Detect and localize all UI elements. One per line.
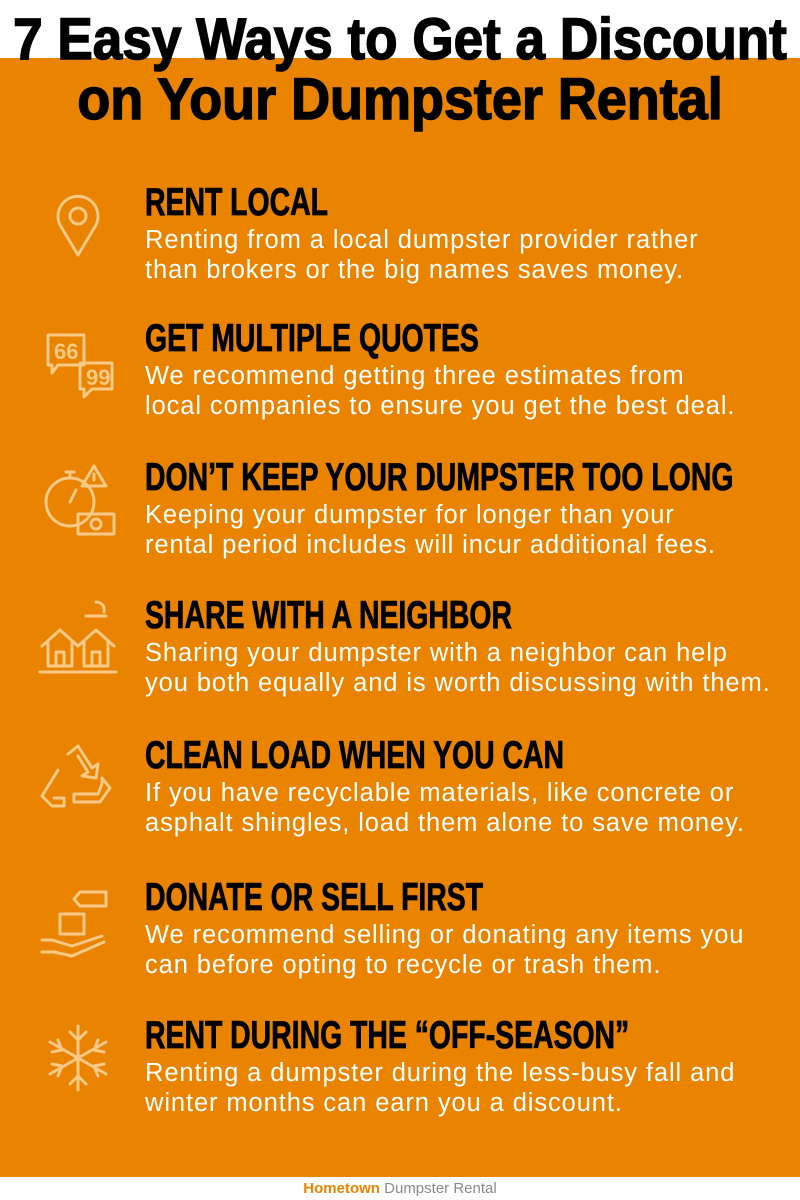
item: share with neighbor: Sharing your dumpster with a neighbor can help <box>145 639 728 667</box>
item: clean load: If you have recyclable materials, like concrete or <box>145 779 734 807</box>
footer logo: Hometown Dumpster Rental <box>303 1180 497 1197</box>
item: clean load: CLEAN LOAD WHEN YOU CAN <box>145 734 564 777</box>
item: don't keep too long: DON’T KEEP YOUR DUMPSTER TOO LONG <box>145 456 733 499</box>
item: donate or sell: can before opting to recycle or trash them. <box>145 951 661 979</box>
title <box>13 7 787 132</box>
item: off-season: winter months can earn you a discount. <box>145 1089 623 1117</box>
item: off-season: Renting a dumpster during the less-busy fall and <box>145 1059 735 1087</box>
title: on Your Dumpster Rental <box>77 67 723 132</box>
item: multiple quotes <box>46 317 735 420</box>
icon: quote bubbles: 99 <box>86 365 110 390</box>
item: clean load: asphalt shingles, load them alone to save money. <box>145 809 745 837</box>
item: share with neighbor <box>38 594 771 697</box>
item: multiple quotes: We recommend getting three estimates from <box>145 362 685 390</box>
icon: quote bubbles <box>46 334 114 399</box>
item: multiple quotes: local companies to ensure you get the best deal. <box>145 392 735 420</box>
item: share with neighbor: SHARE WITH A NEIGHBOR <box>145 594 512 637</box>
item: don't keep too long <box>44 456 733 559</box>
item: rent local: RENT LOCAL <box>145 181 328 224</box>
item: off-season: RENT DURING THE “OFF-SEASON” <box>145 1014 629 1057</box>
icon: houses <box>38 600 118 674</box>
title: 7 Easy Ways to Get a Discount <box>13 7 787 72</box>
item: don't keep too long: Keeping your dumpster for longer than your <box>145 501 675 529</box>
icon: stopwatch and money <box>44 464 116 536</box>
item: clean load <box>40 734 745 837</box>
item: rent local <box>56 181 699 284</box>
item: donate or sell: We recommend selling or donating any items you <box>145 921 744 949</box>
icon: recycle <box>40 744 112 808</box>
item: rent local: than brokers or the big names saves money. <box>145 256 684 284</box>
item: share with neighbor: you both equally and is worth discussing with them. <box>145 669 771 697</box>
item: donate or sell <box>40 876 744 979</box>
item: multiple quotes: GET MULTIPLE QUOTES <box>145 317 479 360</box>
icon: location pin <box>56 194 100 257</box>
item: don't keep too long: rental period includes will incur additional fees. <box>145 531 716 559</box>
item: donate or sell: DONATE OR SELL FIRST <box>145 876 483 919</box>
item: rent local: Renting from a local dumpster provider rather <box>145 226 699 254</box>
icon: hand with box and tag <box>40 890 108 958</box>
item: off-season <box>48 1014 735 1117</box>
icon: snowflake <box>48 1024 108 1092</box>
icon: quote bubbles: 66 <box>54 339 78 364</box>
